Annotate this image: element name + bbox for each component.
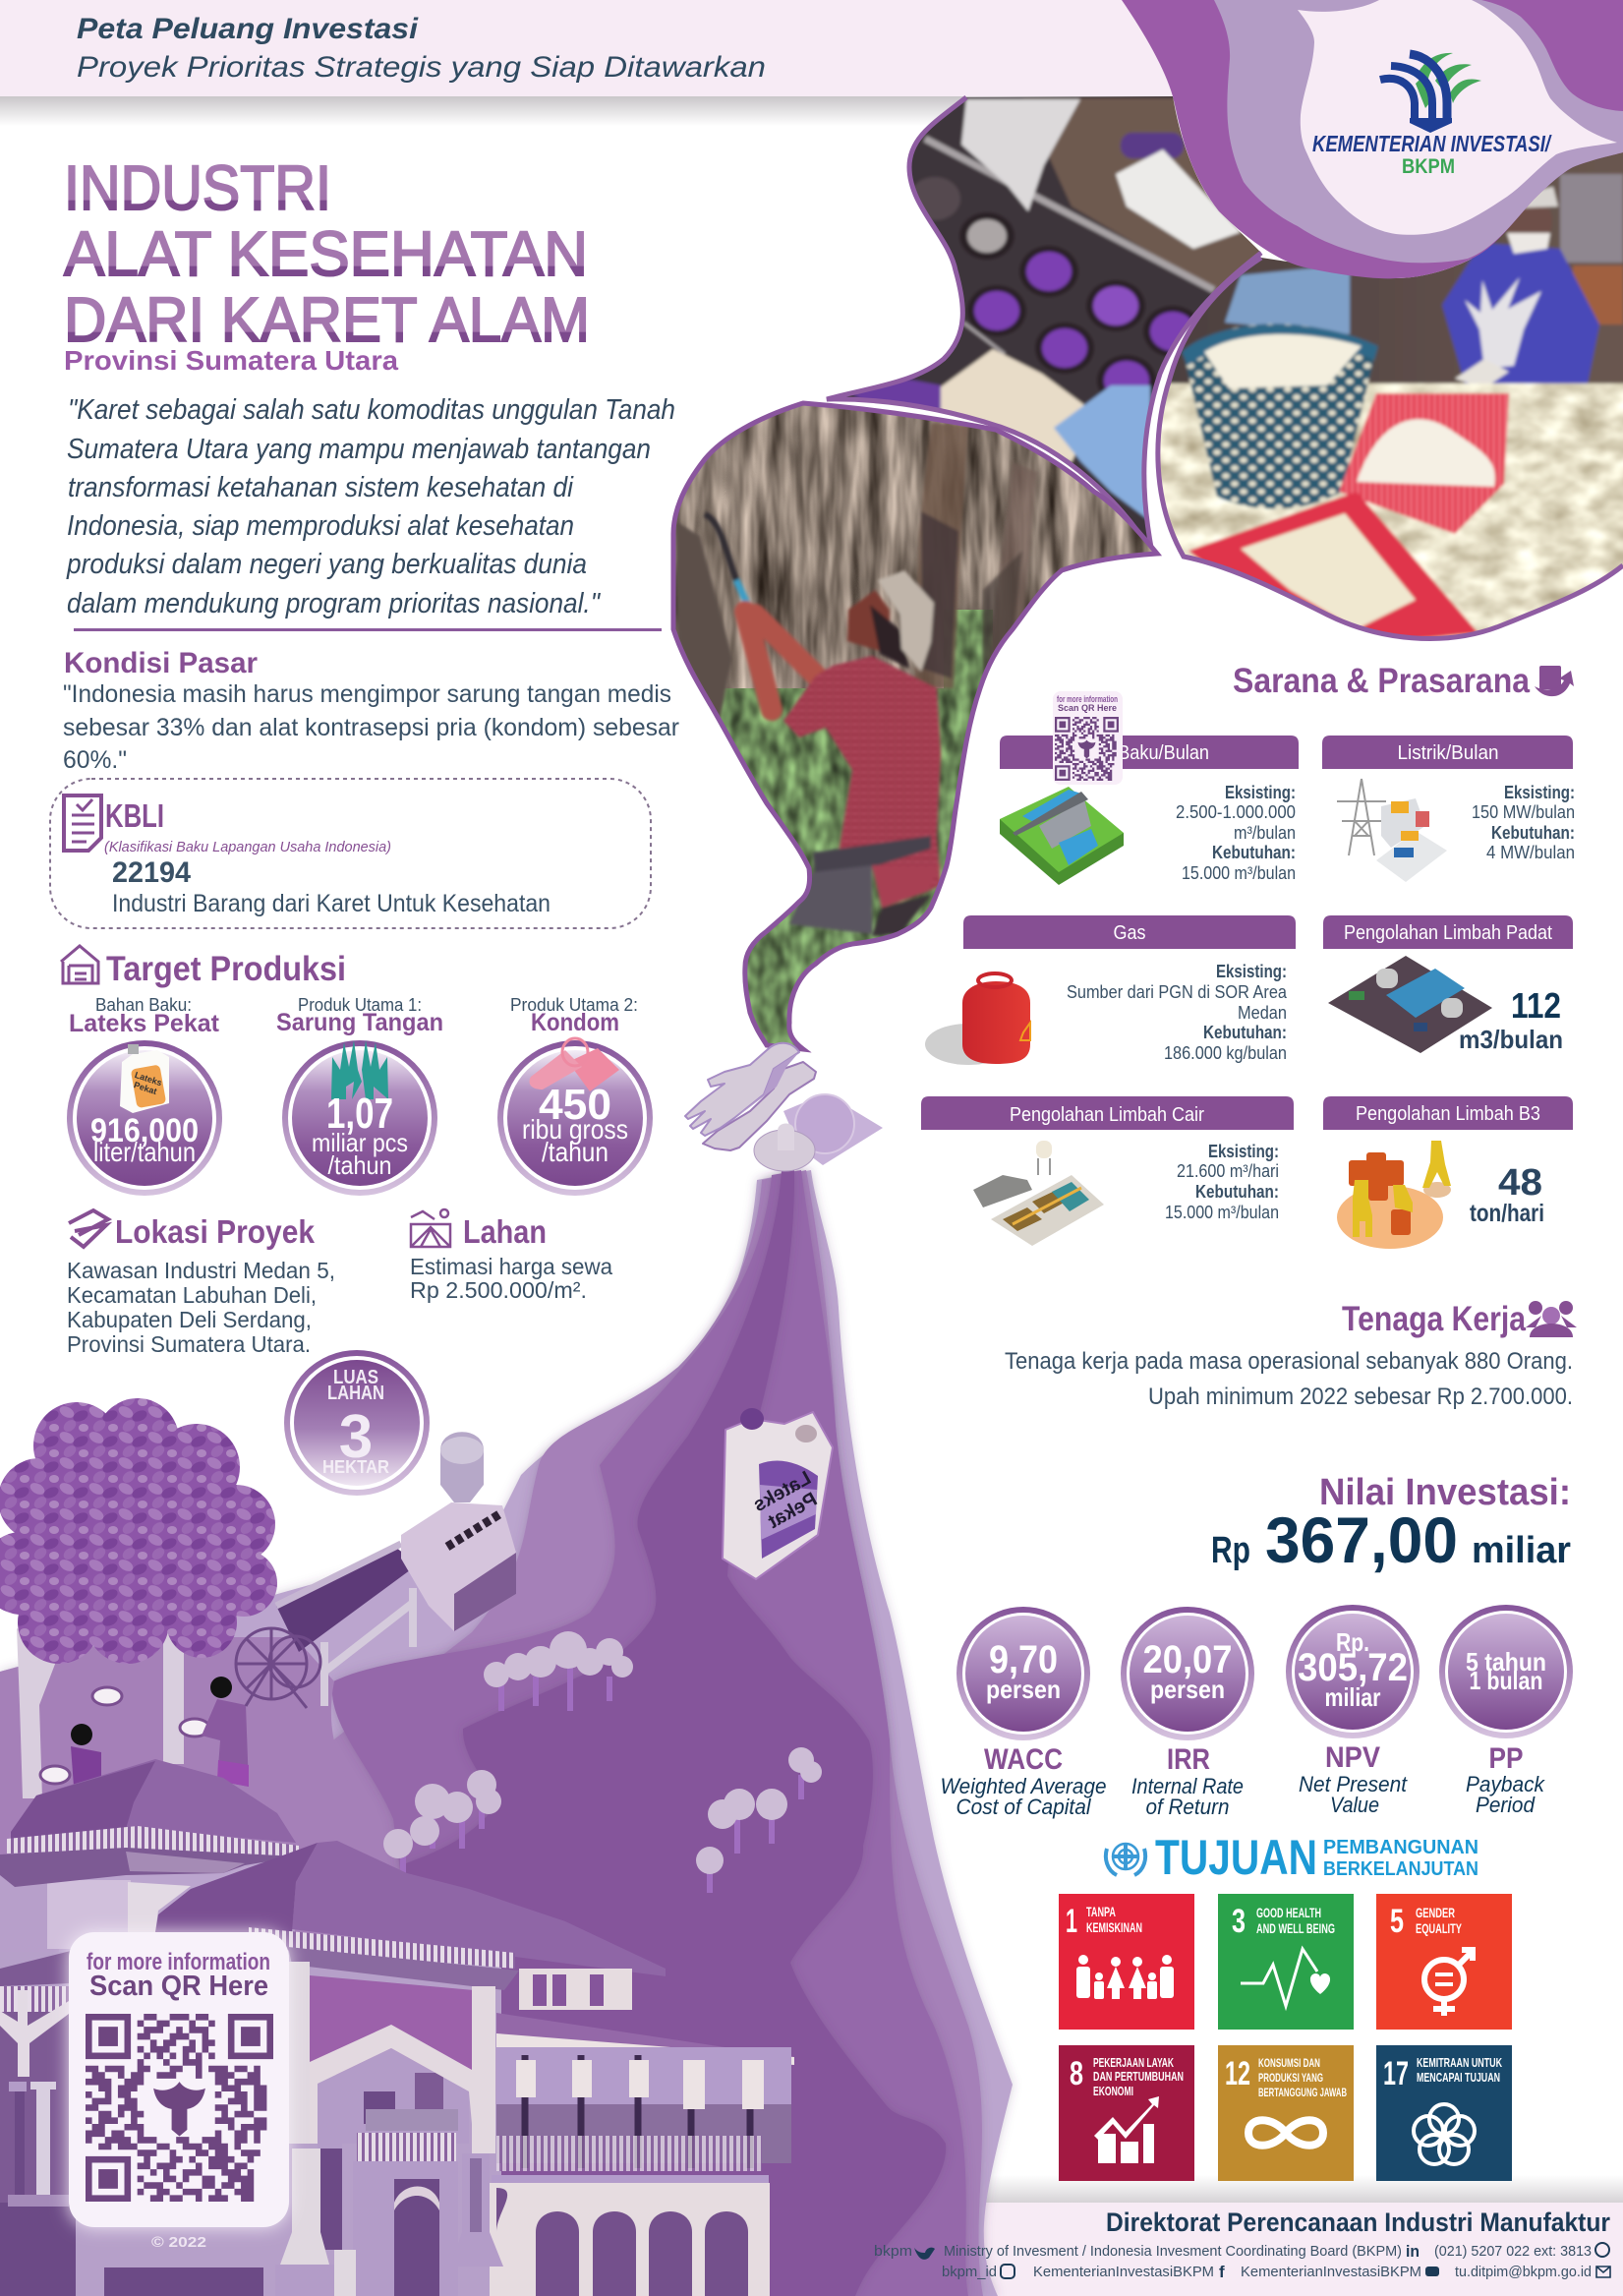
- metric: PP: 5 tahun: [1466, 1647, 1546, 1677]
- metric: NPV: Rp.: [1336, 1627, 1369, 1657]
- face: [847, 590, 890, 654]
- footer contact: [874, 2208, 1610, 2281]
- footer contact: (021) 5207 022 ext: 3813: [1434, 2243, 1592, 2260]
- target: Sarung Tangan: Produk Utama 1:: [298, 995, 422, 1015]
- icon: solid waste plant: [1328, 956, 1492, 1053]
- target: Kondom: [497, 995, 653, 1196]
- photo: latex gloves sorting: [1140, 138, 1623, 649]
- icon: growth chart: [1094, 2096, 1159, 2163]
- kondisi pasar: Kondisi Pasar: [64, 647, 258, 679]
- target: Sarung Tangan: 1,07: [326, 1089, 393, 1138]
- icon: mail: [1596, 2267, 1610, 2277]
- qr pattern: [86, 2014, 273, 2202]
- card: pengolahan limbah padat: 112: [1511, 985, 1561, 1026]
- target: Lateks Pekat: 916,000: [90, 1112, 199, 1149]
- section: lokasi proyek: Kabupaten Deli Serdang,: [67, 1307, 312, 1332]
- icon: people: [1526, 1301, 1577, 1337]
- metric: WACC: 9,70: [989, 1638, 1058, 1681]
- icon: hazardous waste: [1337, 1141, 1451, 1249]
- card: pengolahan limbah cair: Pengolahan Limbah Cair: [1010, 1104, 1204, 1126]
- card: gas: Kebutuhan:: [1203, 1023, 1287, 1042]
- metric: PP: Period: [1476, 1793, 1536, 1817]
- building: palace: [0, 1759, 794, 2296]
- SDG heading: PEMBANGUNAN: [1323, 1837, 1478, 1858]
- footer band: [885, 2175, 1623, 2296]
- quote: produksi dalam negeri yang berkualitas dunia: [66, 549, 587, 580]
- icon: water treatment plant: [973, 1141, 1104, 1246]
- icon: flower rings: [1414, 2104, 1475, 2164]
- footer contact: Ministry of Invesment / Indonesia Invesment Coordinating Board (BKPM): [944, 2243, 1402, 2260]
- section: tenaga kerja: Tenaga Kerja: [1342, 1300, 1526, 1338]
- SDG tile 17: KEMITRAAN UNTUK: [1417, 2055, 1502, 2070]
- knife: [705, 514, 736, 580]
- header band: [0, 0, 1209, 126]
- mini QR code: for more information: [1057, 694, 1118, 704]
- panel: KBLI: (Klasifikasi Baku Lapangan Usaha Indonesia): [104, 839, 391, 855]
- icon: land field: [411, 1209, 450, 1247]
- icon: dam: [1000, 787, 1124, 885]
- kondisi pasar: [63, 647, 679, 774]
- icon: document: [64, 795, 101, 851]
- jerrycan: Lateks Pekat: Lateks: [750, 1467, 815, 1516]
- SDG tile 3: 3: [1232, 1903, 1246, 1940]
- SDG tile 1: KEMISKINAN: [1086, 1919, 1142, 1935]
- metric: WACC: WACC: [984, 1743, 1063, 1776]
- metric: PP: PP: [1488, 1742, 1524, 1775]
- card: air baku: 15.000 m³/bulan: [1182, 863, 1296, 883]
- section: lahan: Rp 2.500.000/m².: [410, 1277, 587, 1303]
- metric: NPV: [1286, 1605, 1420, 1817]
- section: tenaga kerja: Upah minimum 2022 sebesar Rp 2.700.000.: [1148, 1383, 1573, 1410]
- icon: infinity: [1248, 2120, 1323, 2146]
- glove upper: [685, 1043, 799, 1136]
- icon: jerrycan: Lateks: [134, 1070, 163, 1088]
- jerrycan: Lateks Pekat: Pekat: [764, 1489, 821, 1533]
- copyright: © 2022: [151, 2234, 206, 2251]
- badge: luas lahan: LAHAN: [327, 1383, 384, 1404]
- icon: pink condom pack: [529, 1038, 619, 1091]
- footer contact: bkpm_id: [942, 2264, 997, 2280]
- quote: transformasi ketahanan sistem kesehatan di: [68, 472, 574, 503]
- target: Lateks Pekat: Bahan Baku:: [95, 995, 192, 1015]
- badge: luas lahan: 3: [339, 1403, 373, 1471]
- trunk right: [158, 1582, 203, 1764]
- icon: power plant: [1337, 779, 1447, 882]
- card: gas: Sumber dari PGN di SOR Area: [1067, 982, 1288, 1002]
- panel: KBLI: [50, 779, 651, 928]
- jerrycan: Lateks Pekat: [723, 1408, 833, 1579]
- mini QR code: [1053, 691, 1123, 785]
- icon: gas tank: [925, 973, 1030, 1065]
- SDG tile 8: EKONOMI: [1093, 2084, 1133, 2098]
- condom disc: [754, 1123, 815, 1171]
- SDG tile 1: 1: [1066, 1903, 1077, 1940]
- target: Lateks Pekat: liter/tahun: [93, 1137, 196, 1167]
- icon: glove and condom packet: [685, 1043, 883, 1171]
- SDG tile 5: EQUALITY: [1416, 1920, 1462, 1936]
- nilai investasi: miliar: [1472, 1530, 1571, 1571]
- SDG tile 1: [1059, 1894, 1194, 2030]
- icon: UN emblem: [1106, 1844, 1145, 1875]
- logo blob layers: [1122, 0, 1623, 278]
- small trees: [383, 1631, 822, 1893]
- target: Kondom: 450: [539, 1081, 611, 1129]
- panel: QR code: Scan QR Here: [89, 1971, 268, 2002]
- lower base: [0, 1952, 501, 2296]
- card: gas: Eksisting:: [1216, 962, 1287, 981]
- kondisi pasar: sebesar 33% dan alat kontrasepsi pria (kondom) sebesar: [63, 714, 679, 741]
- title: DARI KARET ALAM: [64, 284, 590, 355]
- machine: extruder: [236, 1432, 516, 1708]
- target: Lateks Pekat: Lateks Pekat: [69, 1010, 220, 1037]
- card: pengolahan limbah B3: ton/hari: [1470, 1200, 1544, 1227]
- icon: phone: [1595, 2243, 1609, 2257]
- icon: map layers: [69, 1210, 108, 1247]
- SDG tile 3: AND WELL BEING: [1256, 1920, 1335, 1936]
- glove lower: [703, 1062, 816, 1150]
- metric: NPV: Net Present: [1299, 1772, 1408, 1796]
- icon: teal gloves: [331, 1040, 388, 1099]
- icon: document arrow: [1535, 666, 1574, 696]
- hat: [878, 570, 934, 672]
- SDG tile 1: TANPA: [1086, 1904, 1116, 1919]
- metric: PP: 1 bulan: [1469, 1666, 1543, 1695]
- metric: IRR: Internal Rate: [1131, 1774, 1244, 1798]
- hill behind trees: [0, 1637, 364, 1858]
- section: lokasi proyek: [67, 1210, 335, 1357]
- target: Kondom: ribu gross: [522, 1114, 628, 1145]
- footer contact: in: [1406, 2242, 1420, 2261]
- target: Kondom: /tahun: [542, 1137, 609, 1167]
- card: gas: Gas: [1113, 922, 1146, 944]
- lower arches: [490, 2183, 770, 2296]
- target: Kondom: Produk Utama 2:: [510, 995, 638, 1015]
- metric: PP: [1439, 1605, 1573, 1817]
- card: air baku: m³/bulan: [1234, 823, 1296, 843]
- kondisi pasar: 60%.": [63, 746, 127, 774]
- metric: NPV: NPV: [1325, 1741, 1380, 1774]
- kondisi pasar: "Indonesia masih harus mengimpor sarung tangan medis: [63, 680, 671, 708]
- SDG tile 3: [1218, 1894, 1354, 2030]
- SDG tile 12: PRODUKSI YANG: [1258, 2071, 1323, 2085]
- arms: [745, 612, 824, 710]
- SDG tile 5: GENDER: [1416, 1905, 1455, 1920]
- nilai investasi: [1211, 1472, 1571, 1576]
- target: Kondom: Kondom: [531, 1009, 619, 1036]
- card: air baku: Air Baku/Bulan: [1091, 742, 1209, 764]
- section: tenaga kerja: [1005, 1300, 1577, 1410]
- card: pengolahan limbah B3: [1323, 1096, 1573, 1249]
- heading: sarana dan prasarana: Sarana & Prasarana: [1233, 662, 1530, 700]
- card: pengolahan limbah padat: m3/bulan: [1459, 1025, 1563, 1054]
- metric: PP: Payback: [1466, 1772, 1545, 1796]
- hopper: [440, 1432, 484, 1502]
- quote: Indonesia, siap memproduksi alat kesehatan: [67, 510, 574, 542]
- SDG tile 12: BERTANGGUNG JAWAB: [1258, 2086, 1347, 2099]
- card: pengolahan limbah padat: Pengolahan Limbah Padat: [1344, 922, 1552, 944]
- footer contact: bkpm: [874, 2243, 912, 2260]
- photo: condom moulds: [816, 88, 1278, 560]
- panel: KBLI: KBLI: [105, 797, 164, 834]
- section: lokasi proyek: Lokasi Proyek: [115, 1213, 316, 1250]
- quote: "Karet sebagai salah satu komoditas unggulan Tanah: [68, 394, 675, 426]
- pillars: [472, 1986, 495, 2153]
- title: ALAT KESEHATAN: [64, 218, 588, 289]
- badge: luas lahan: LUAS: [333, 1367, 378, 1388]
- workers tapping rubber: [71, 1677, 249, 1787]
- footer contact: f: [1219, 2263, 1225, 2281]
- card: listrik: Listrik/Bulan: [1398, 742, 1498, 764]
- badge: luas lahan: [284, 1350, 430, 1496]
- trunk left: [17, 1628, 62, 1798]
- SDG tile 5: [1376, 1894, 1512, 2030]
- mini QR code: Scan QR Here: [1058, 703, 1117, 713]
- section: lokasi proyek: Kawasan Industri Medan 5,: [67, 1258, 335, 1283]
- title: INDUSTRI: [64, 152, 331, 223]
- card: pengolahan limbah padat: [1323, 915, 1573, 1054]
- icon: jerrycan: Pekat: [133, 1080, 158, 1096]
- central wall: [310, 1975, 474, 2075]
- header title: Proyek Prioritas Strategis yang Siap Ditawarkan: [77, 51, 766, 84]
- metric: NPV: miliar: [1325, 1682, 1380, 1712]
- SDG tile 8: DAN PERTUMBUHAN: [1093, 2069, 1184, 2084]
- metric: IRR: of Return: [1146, 1795, 1229, 1819]
- icon: twitter: [914, 2248, 935, 2260]
- river landscape: [0, 1170, 1013, 2296]
- SDG tile 8: 8: [1070, 2055, 1083, 2092]
- card: pengolahan limbah cair: Kebutuhan:: [1195, 1182, 1279, 1202]
- section: lokasi proyek: Provinsi Sumatera Utara.: [67, 1331, 311, 1357]
- header title: Peta Peluang Investasi: [77, 13, 419, 45]
- section: lokasi proyek: Kecamatan Labuhan Deli,: [67, 1282, 317, 1308]
- metric: WACC: Cost of Capital: [956, 1795, 1092, 1819]
- target: Lateks Pekat: [67, 995, 222, 1196]
- tree: rubber trees: [0, 1398, 277, 1798]
- icon: jerrycan: [120, 1044, 169, 1113]
- packet: [783, 1093, 883, 1165]
- card: pengolahan limbah B3: 48: [1498, 1162, 1542, 1204]
- metric: WACC: [940, 1607, 1107, 1819]
- card: air baku: Kebutuhan:: [1212, 843, 1296, 862]
- SDG tile 12: KONSUMSI DAN: [1258, 2056, 1320, 2070]
- card: pengolahan limbah B3: Pengolahan Limbah B3: [1356, 1103, 1540, 1125]
- quote: dalam mendukung program prioritas nasional.": [67, 588, 602, 619]
- latex cups: [40, 1687, 209, 1784]
- target: Sarung Tangan: miliar pcs: [312, 1128, 408, 1157]
- shirt: [783, 656, 941, 908]
- quote: [66, 394, 675, 619]
- SDG heading: TUJUAN: [1155, 1830, 1317, 1885]
- card: listrik: Eksisting:: [1504, 783, 1575, 802]
- left roof: [11, 1759, 296, 1843]
- logo: Kementerian Investasi / BKPM: [1312, 53, 1552, 178]
- metric: NPV: 305,72: [1298, 1646, 1408, 1689]
- section: tenaga kerja: Tenaga kerja pada masa operasional sebanyak 880 Orang.: [1005, 1348, 1573, 1375]
- icon: gender equality: [1424, 1950, 1473, 2016]
- target: Sarung Tangan: [276, 995, 443, 1196]
- SDG heading: [1106, 1830, 1478, 1885]
- big trunks: [914, 423, 968, 688]
- icon: youtube: [1425, 2267, 1439, 2276]
- section: lahan: Lahan: [463, 1213, 547, 1250]
- photo: rubber tapper: [668, 398, 1160, 1057]
- metric: IRR: 20,07: [1142, 1638, 1233, 1681]
- panel: KBLI: 22194: [112, 856, 191, 889]
- target: Sarung Tangan: Sarung Tangan: [276, 1009, 443, 1036]
- icon: warehouse: [61, 946, 98, 983]
- card: listrik: Kebutuhan:: [1491, 823, 1575, 843]
- reel wheel: [236, 1628, 320, 1708]
- upper cream wall: [519, 1969, 632, 2010]
- belt and bucket: [812, 834, 933, 873]
- panel: KBLI: Industri Barang dari Karet Untuk Kesehatan: [112, 890, 551, 917]
- icon: family: [1076, 1955, 1174, 1999]
- belt: [276, 1547, 418, 1652]
- SDG heading: BERKELANJUTAN: [1323, 1858, 1478, 1880]
- SDG tile 17: MENCAPAI TUJUAN: [1417, 2070, 1500, 2085]
- SDG tile 3: GOOD HEALTH: [1256, 1905, 1321, 1920]
- metric: WACC: persen: [986, 1675, 1061, 1704]
- card: listrik: 150 MW/bulan: [1472, 802, 1575, 822]
- central arch: [318, 2048, 469, 2144]
- card: air baku: [1000, 736, 1299, 885]
- card: air baku: Eksisting:: [1225, 783, 1296, 802]
- section: lahan: [410, 1209, 612, 1303]
- province subtitle: Provinsi Sumatera Utara: [64, 345, 398, 376]
- footer contact: KementerianInvestasiBKPM: [1241, 2264, 1421, 2280]
- panel: QR code: for more information: [87, 1949, 270, 1975]
- target: Sarung Tangan: /tahun: [328, 1150, 391, 1180]
- SDG tile 17: 17: [1383, 2055, 1409, 2092]
- nilai investasi: Rp: [1211, 1530, 1250, 1571]
- card: air baku: 2.500-1.000.000: [1176, 802, 1296, 822]
- veranda: [496, 2047, 791, 2146]
- card: gas: Medan: [1238, 1003, 1287, 1023]
- left pavilion: [0, 1951, 71, 1986]
- card: pengolahan limbah cair: Eksisting:: [1208, 1142, 1279, 1161]
- SDG tile 5: 5: [1390, 1903, 1404, 1940]
- SDG tile 12: [1218, 2045, 1354, 2181]
- SDG tile 12: 12: [1225, 2055, 1250, 2092]
- SDG tile 8: [1059, 2045, 1194, 2181]
- main roof: [292, 1841, 666, 1976]
- metric: IRR: [1121, 1607, 1254, 1819]
- metric: WACC: Weighted Average: [940, 1774, 1107, 1798]
- left wing: [0, 1873, 59, 1981]
- SDG tile 8: PEKERJAAN LAYAK: [1093, 2055, 1174, 2070]
- card: pengolahan limbah cair: [921, 1096, 1294, 1246]
- logo mark: [1380, 53, 1481, 133]
- footer contact: KementerianInvestasiBKPM: [1033, 2264, 1214, 2280]
- card: gas: 186.000 kg/bulan: [1164, 1043, 1287, 1063]
- logo: Kementerian Investasi / BKPM: KEMENTERIAN INVESTASI/: [1312, 131, 1552, 156]
- panel: QR code: [69, 1932, 289, 2227]
- metric: IRR: IRR: [1167, 1743, 1210, 1776]
- badge: luas lahan: HEKTAR: [322, 1457, 389, 1477]
- icon: instagram: [1001, 2265, 1014, 2278]
- card: pengolahan limbah cair: 15.000 m³/bulan: [1165, 1203, 1279, 1222]
- machine body: [401, 1502, 516, 1631]
- metric: IRR: persen: [1150, 1675, 1225, 1704]
- card: gas: [925, 915, 1296, 1065]
- card: pengolahan limbah cair: 21.600 m³/hari: [1177, 1161, 1279, 1181]
- heading: target produksi: Target Produksi: [106, 950, 346, 988]
- card: listrik: 4 MW/bulan: [1486, 843, 1575, 862]
- SDG tile 17: [1376, 2045, 1512, 2181]
- section: lahan: Estimasi harga sewa: [410, 1254, 612, 1279]
- metric: NPV: Value: [1330, 1793, 1379, 1817]
- nilai investasi: 367,00: [1265, 1503, 1458, 1576]
- title: [64, 152, 590, 355]
- header title: [77, 13, 766, 84]
- quote: Sumatera Utara yang mampu menjawab tantangan: [67, 434, 651, 465]
- icon: heartbeat: [1241, 1949, 1330, 2006]
- logo: Kementerian Investasi / BKPM: BKPM: [1402, 155, 1455, 178]
- footer contact: tu.ditpim@bkpm.go.id: [1455, 2264, 1592, 2280]
- canopy: [0, 1398, 277, 1664]
- card: listrik: [1322, 736, 1575, 882]
- lower roof: [496, 2013, 790, 2063]
- nilai investasi: Nilai Investasi:: [1319, 1472, 1571, 1513]
